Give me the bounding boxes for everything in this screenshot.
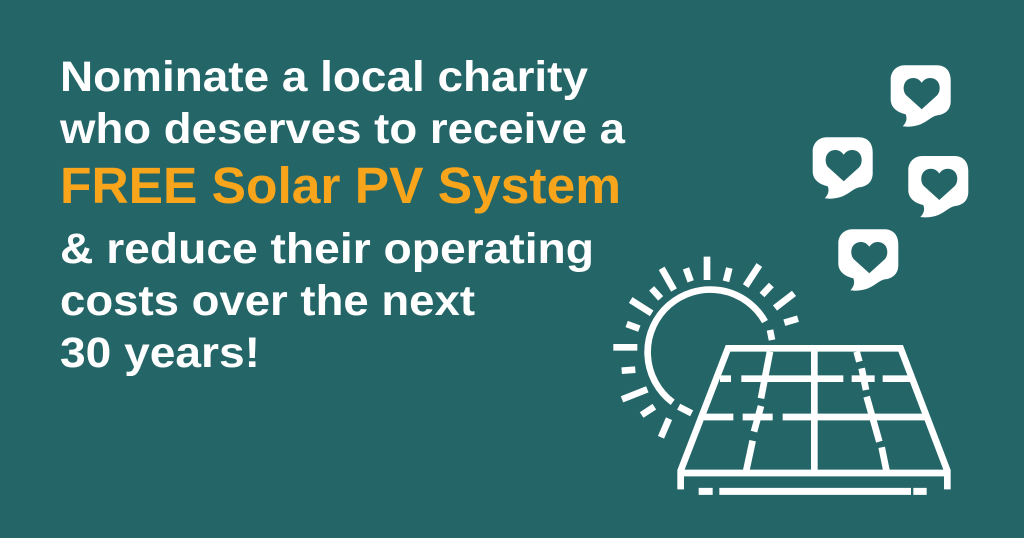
icon: sun arc and rays [613, 257, 798, 437]
headline text: who deserves to receive a [59, 105, 626, 153]
icon: solar panel [681, 348, 947, 491]
headline text: 30 years! [60, 329, 260, 377]
headline text: costs over the next [60, 277, 475, 325]
icon: heart bubble right [908, 156, 968, 217]
headline text [59, 53, 626, 377]
headline text: & reduce their operating [60, 225, 594, 273]
highlighted offer line: FREE Solar PV System [60, 157, 621, 214]
icon: heart bubble top [891, 65, 951, 127]
icon: heart bubble left [813, 137, 873, 199]
headline text: Nominate a local charity [60, 53, 588, 101]
icon: heart speech bubbles [813, 65, 968, 291]
icon: sun and solar panel [613, 257, 947, 491]
icon: heart bubble bottom [838, 229, 898, 291]
